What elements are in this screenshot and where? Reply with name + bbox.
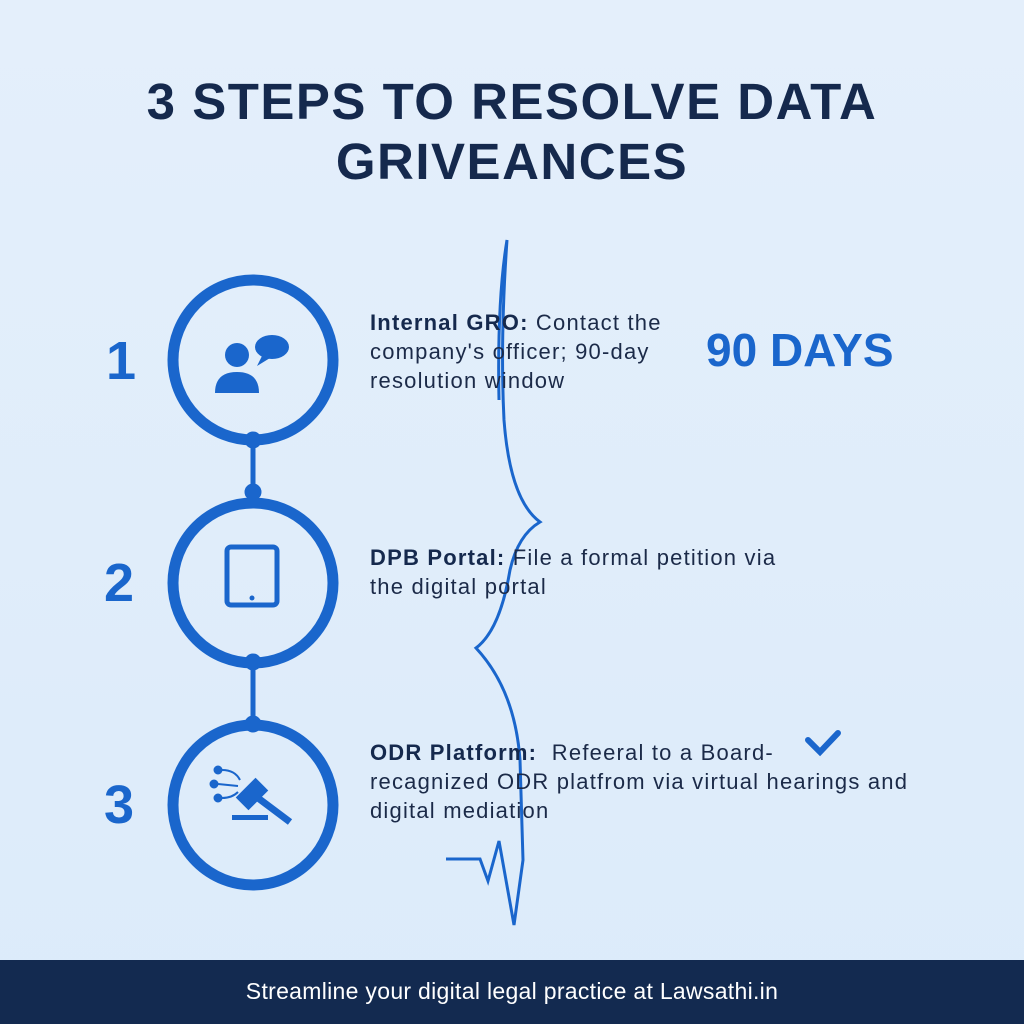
- step 3 text: digital mediation: [370, 798, 549, 823]
- brace / pulse line: [446, 240, 540, 925]
- step 1 text: company's officer; 90-day: [370, 339, 650, 364]
- step 2 text: DPB Portal: File a formal petition via: [370, 545, 776, 570]
- step 3 text: recagnized ODR platfrom via virtual hearings and: [370, 769, 908, 794]
- step 2 text: [370, 545, 776, 599]
- step 3 text: [370, 740, 908, 823]
- step 2 text: the digital portal: [370, 574, 547, 599]
- step 3 text: ODR Platform: Refeeral to a Board-: [370, 740, 774, 765]
- title: 3 STEPS TO RESOLVE DATA: [147, 73, 877, 130]
- circle 2: [173, 503, 333, 663]
- step 1 text: Internal GRO: Contact the: [370, 310, 662, 335]
- number 1: 1: [106, 331, 136, 391]
- connector lines: [247, 434, 259, 730]
- circle 3: [173, 725, 333, 885]
- number 2: 2: [104, 553, 134, 613]
- title: [147, 73, 877, 190]
- checkmark: [808, 733, 838, 752]
- number 3: 3: [104, 775, 134, 835]
- footer: [0, 960, 1024, 1024]
- 90 days callout: 90 DAYS: [706, 324, 894, 376]
- step numbers: [104, 331, 136, 835]
- step 1 text: [370, 310, 662, 393]
- footer: Streamline your digital legal practice at Lawsathi.in: [246, 978, 778, 1004]
- icon: tablet: [227, 547, 277, 605]
- circle 1: [173, 280, 333, 440]
- icon: person with speech bubble: [215, 335, 289, 393]
- icon: gavel with nodes: [210, 766, 290, 822]
- title: GRIVEANCES: [336, 133, 688, 190]
- step 1 text: resolution window: [370, 368, 565, 393]
